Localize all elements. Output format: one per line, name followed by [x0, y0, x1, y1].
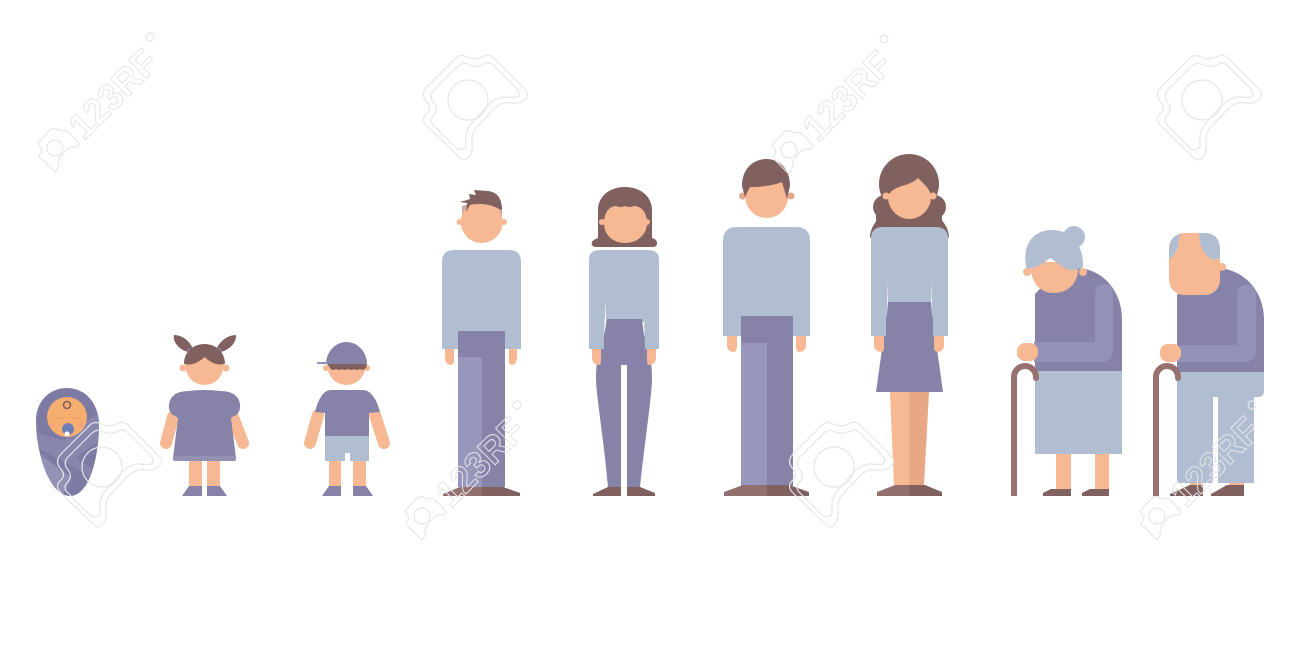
- figure: adult woman: [870, 154, 949, 496]
- figure: adult man: [723, 159, 810, 496]
- watermark: 123RF top left: 123RF: [61, 41, 166, 147]
- watermark: 123RF bottom centre-left: [405, 401, 533, 540]
- figure: swaddled baby: [34, 388, 100, 496]
- figure: boy with cap: [310, 342, 384, 496]
- watermark: 123RF bottom right: 123RF: [1163, 409, 1268, 515]
- hair: [870, 154, 949, 238]
- figure: girl: [166, 335, 243, 496]
- figure: young man: [442, 190, 521, 496]
- watermark: 123RF top centre: [772, 35, 900, 174]
- watermark: 123RF top centre: 123RF: [795, 43, 900, 149]
- watermark: 123RF bottom centre-left: 123RF: [428, 409, 533, 515]
- pigtails: [174, 335, 236, 352]
- figure: young woman: [589, 187, 659, 496]
- figure: elderly woman with cane: [1014, 226, 1122, 496]
- watermark: 123RF top left: [38, 33, 166, 172]
- watermark: large egg logos: [58, 55, 1262, 527]
- watermark: 123RF bottom right: [1140, 401, 1268, 540]
- figure: elderly man with cane: [1156, 233, 1264, 496]
